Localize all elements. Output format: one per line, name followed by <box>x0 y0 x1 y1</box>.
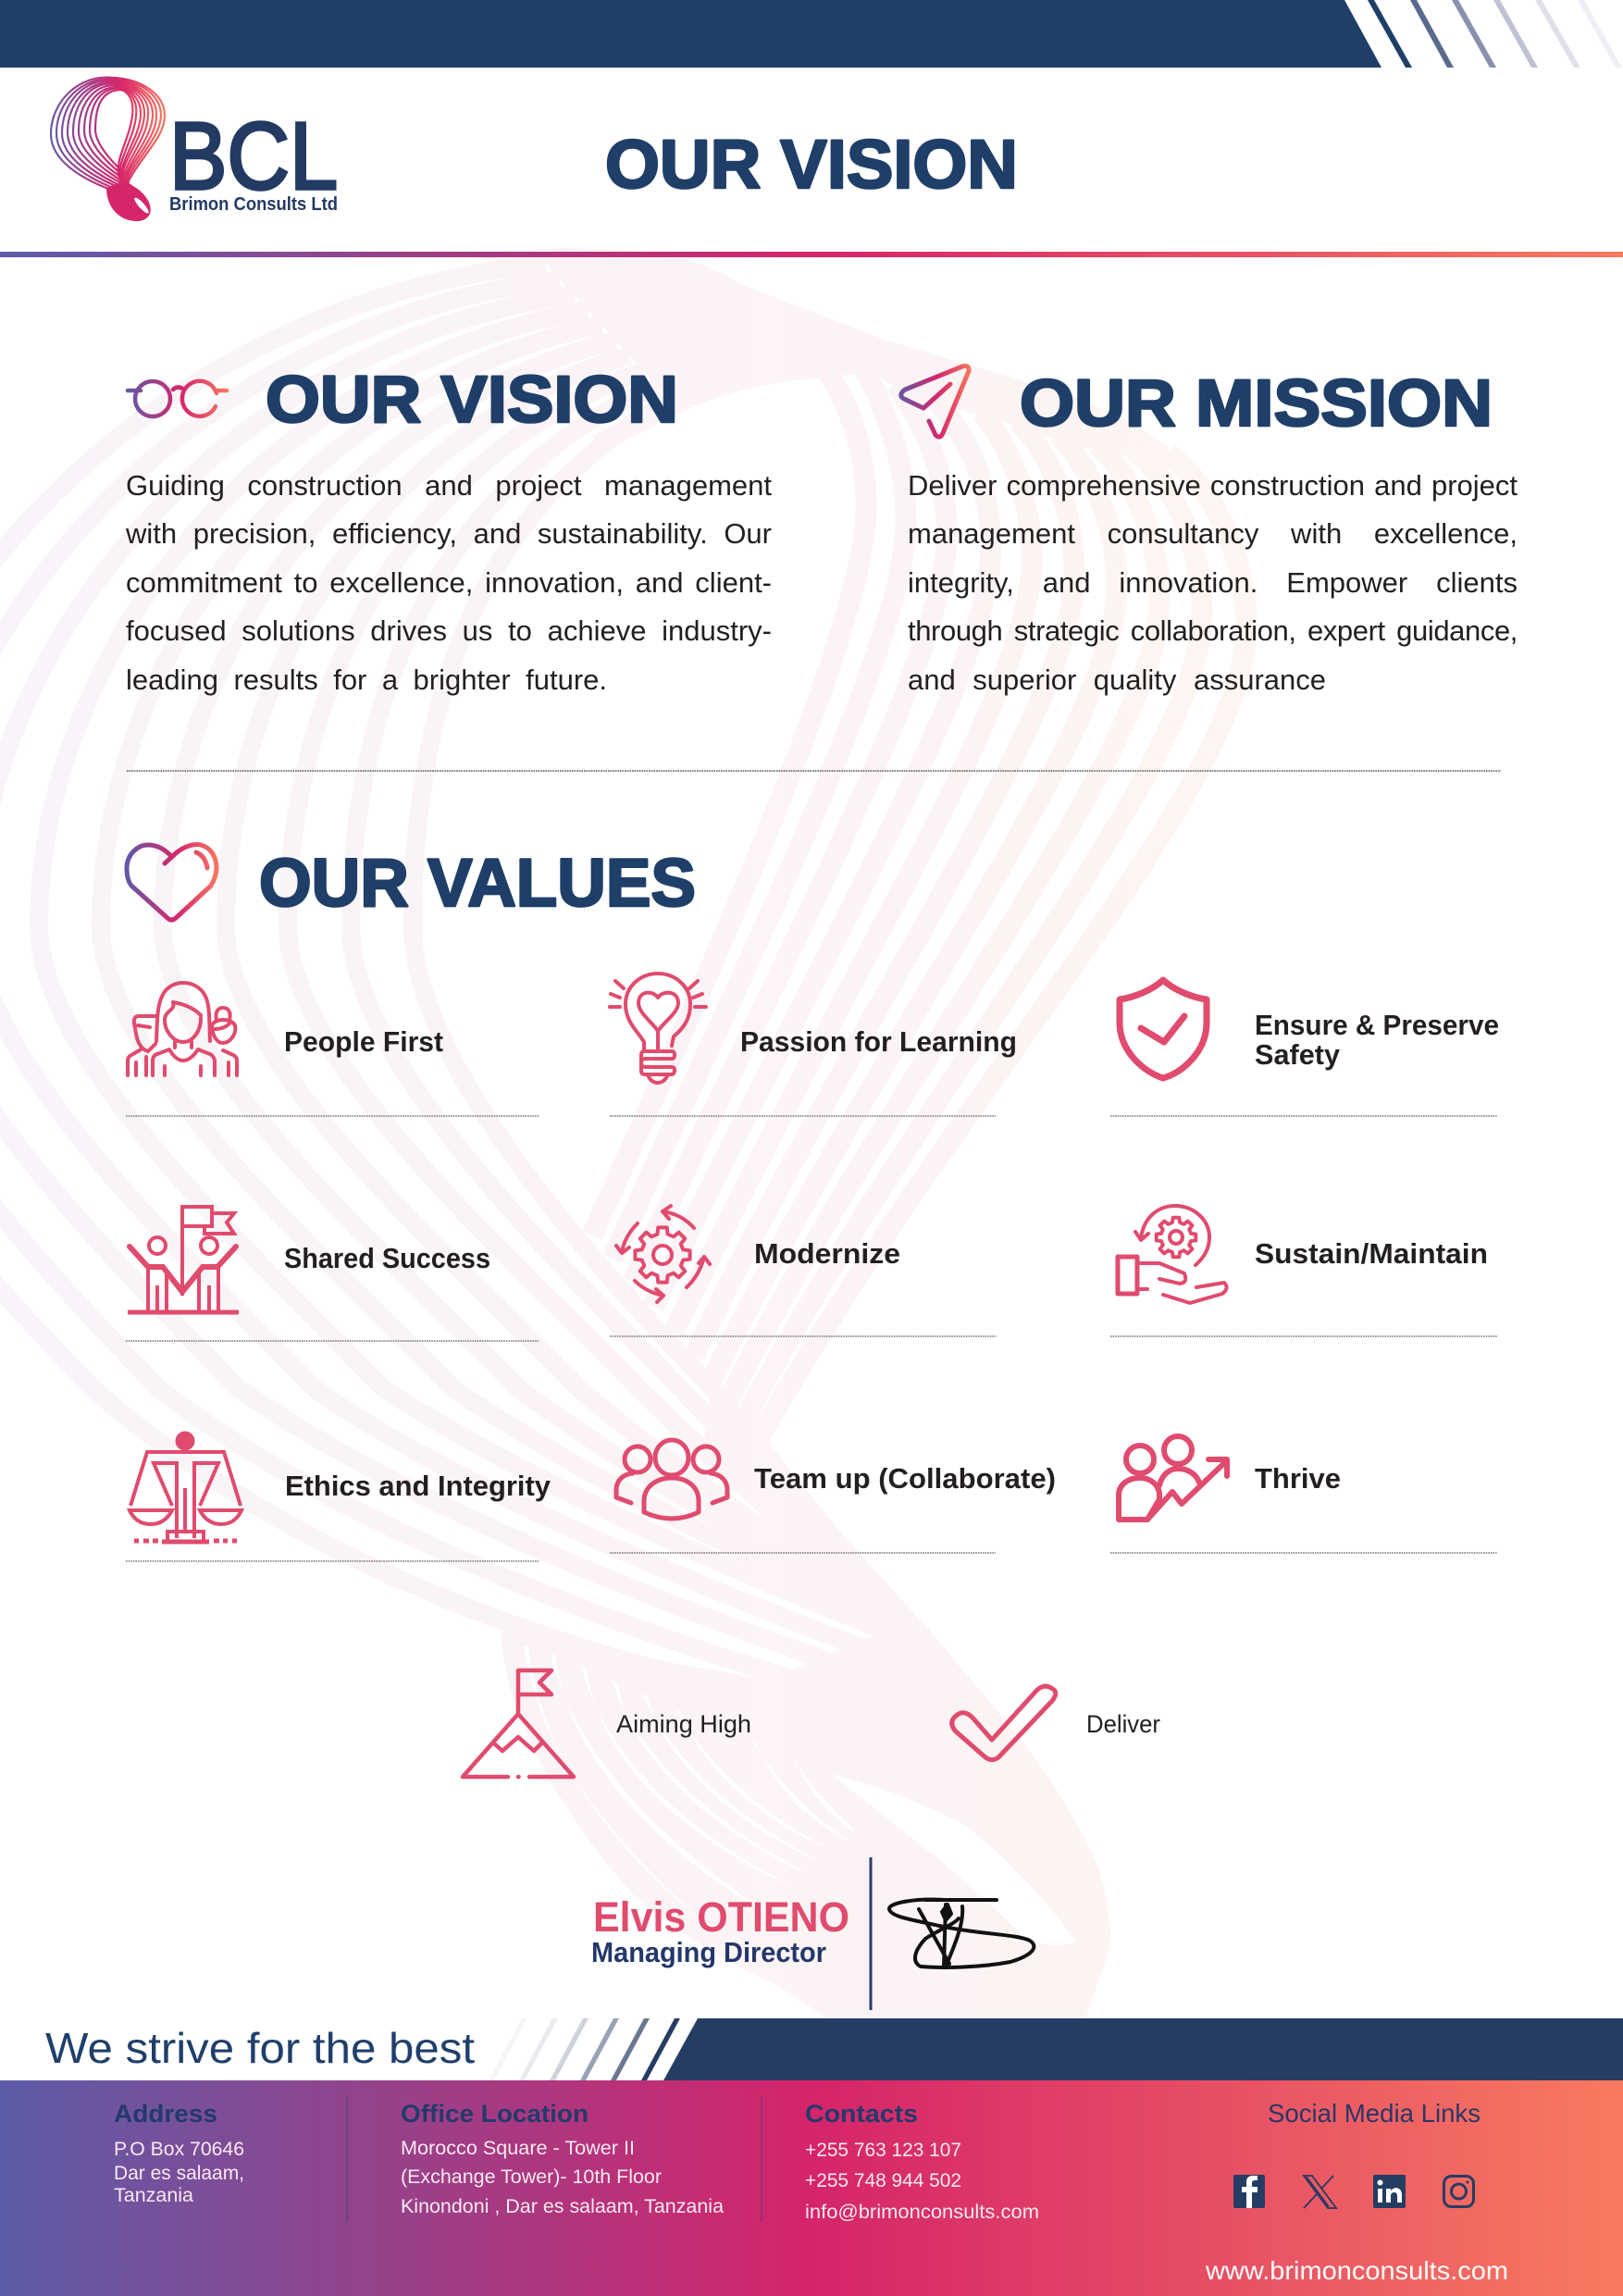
value: People First: People First <box>284 1025 443 1058</box>
tagline: We strive for the best <box>45 2024 475 2072</box>
footer: address: Tanzania <box>114 2185 193 2206</box>
divider <box>127 770 1501 772</box>
value: Modernize <box>610 1206 996 1336</box>
footer: contacts: +255 763 123 107 <box>805 2140 961 2161</box>
footer: social media links: Social Media Links <box>1268 2099 1481 2128</box>
vision paragraph: with precision, efficiency, and sustainability. Our <box>126 517 772 550</box>
icon: linkedin <box>1373 2175 1406 2208</box>
footer: address: P.O Box 70646 <box>114 2139 244 2160</box>
footer: address: Address <box>114 2100 217 2128</box>
icon: team <box>616 1440 727 1519</box>
value: Thrive <box>1110 1436 1497 1553</box>
value: Deliver: Deliver <box>1086 1710 1160 1738</box>
footer: office location: Kinondoni , Dar es salaam, Tanzania <box>401 2196 724 2217</box>
value: Ethics and Integrity: Ethics and Integrity <box>285 1470 551 1502</box>
icon: paper plane <box>901 366 969 437</box>
value: Ethics and Integrity <box>126 1433 551 1561</box>
footer: social media links <box>1233 2099 1481 2208</box>
footer: office location <box>401 2100 724 2217</box>
icon: mountain with flag <box>463 1670 574 1777</box>
icon: shield <box>1120 980 1207 1078</box>
logo ribbon mark <box>51 78 165 221</box>
icon: light bulb with heart <box>610 974 706 1083</box>
vision paragraph: commitment to excellence, innovation, and client- <box>126 566 772 599</box>
footer navy band with stripes <box>489 2018 1623 2080</box>
icon: X <box>1304 2176 1336 2208</box>
value: Thrive: Thrive <box>1255 1462 1341 1495</box>
footer: contacts: Contacts <box>805 2100 918 2128</box>
mission paragraph <box>908 469 1518 696</box>
footer: office location: Office Location <box>401 2100 588 2128</box>
icon: glasses <box>128 381 227 416</box>
heading: our values: OUR VALUES <box>259 846 696 921</box>
mission paragraph: management consultancy with excellence, <box>908 517 1518 550</box>
footer: contacts <box>805 2100 1039 2223</box>
icon: people <box>128 983 237 1075</box>
footer: website: www.brimonconsults.com <box>1205 2256 1508 2285</box>
icon: gear with arrows <box>616 1206 710 1302</box>
mission paragraph: integrity, and innovation. Empower clients <box>908 566 1518 599</box>
icon: facebook <box>1233 2175 1265 2208</box>
value: Team up (Collaborate) <box>610 1440 1056 1553</box>
footer: office location: (Exchange Tower)- 10th Floor <box>401 2166 662 2188</box>
value: Sustain/Maintain: Sustain/Maintain <box>1255 1237 1488 1270</box>
footer: office location: Morocco Square - Tower II <box>401 2138 635 2159</box>
value: Ensure & Preserve Safety: Ensure & Preserve <box>1255 1009 1499 1041</box>
value: Passion for Learning <box>610 974 1017 1116</box>
signatory name and title: Managing Director <box>591 1936 826 1968</box>
signatory name and title <box>591 1893 849 1968</box>
icon: heart <box>127 844 217 920</box>
mission paragraph: Deliver comprehensive construction and project <box>908 469 1518 502</box>
value: Deliver <box>952 1686 1160 1760</box>
footer: contacts: +255 748 944 502 <box>805 2170 961 2191</box>
footer divider <box>346 2096 348 2222</box>
signature <box>889 1900 1034 1967</box>
background watermark ribbon <box>0 248 1246 2022</box>
footer: address: Dar es salaam, <box>114 2163 244 2184</box>
mission paragraph: and superior quality assurance <box>908 664 1326 696</box>
value: Shared Success: Shared Success <box>284 1242 490 1274</box>
value: Sustain/Maintain <box>1110 1206 1497 1336</box>
value: Aiming High <box>463 1670 751 1777</box>
footer: contacts: info@brimonconsults.com <box>805 2202 1039 2223</box>
value: People First <box>126 983 539 1116</box>
logo: BCL Brimon Consults Ltd <box>51 78 338 221</box>
icon: people and rising arrow <box>1119 1436 1227 1520</box>
logo: BCL Brimon Consults Ltd: Brimon Consults Ltd <box>169 194 338 215</box>
heading: our mission: OUR MISSION <box>1020 367 1493 441</box>
vision paragraph: focused solutions drives us to achieve industry- <box>126 614 772 647</box>
icon: scales <box>130 1433 242 1542</box>
icon: hand holding gear <box>1118 1206 1227 1303</box>
value: Passion for Learning: Passion for Learning <box>740 1025 1017 1058</box>
value: Modernize: Modernize <box>754 1237 900 1270</box>
signatory name and title: Elvis OTIENO <box>593 1893 849 1941</box>
footer: address <box>114 2100 244 2206</box>
signature divider <box>870 1857 872 2010</box>
vision paragraph <box>126 469 772 696</box>
icon: instagram <box>1443 2177 1473 2206</box>
header gradient rule <box>0 252 1623 257</box>
icon: check mark <box>952 1686 1056 1760</box>
value: Shared Success <box>126 1207 539 1341</box>
value: Aiming High: Aiming High <box>616 1710 751 1738</box>
vision paragraph: Guiding construction and project management <box>126 469 772 502</box>
value: Ensure & Preserve Safety <box>1110 980 1499 1116</box>
value: Team up (Collaborate): Team up (Collaborate) <box>754 1462 1056 1495</box>
value: Ensure & Preserve Safety: Safety <box>1255 1038 1341 1071</box>
top banner with stripes <box>0 0 1622 68</box>
logo: BCL Brimon Consults Ltd: BCL <box>169 103 338 209</box>
vision paragraph: leading results for a brighter future. <box>126 664 607 696</box>
footer divider <box>761 2096 762 2222</box>
heading: our vision: OUR VISION <box>266 364 678 437</box>
footer gradient panel <box>0 2080 1623 2296</box>
page title: OUR VISION <box>605 126 1018 203</box>
icon: people with flag <box>128 1207 239 1312</box>
mission paragraph: through strategic collaboration, expert guidance, <box>908 614 1518 647</box>
